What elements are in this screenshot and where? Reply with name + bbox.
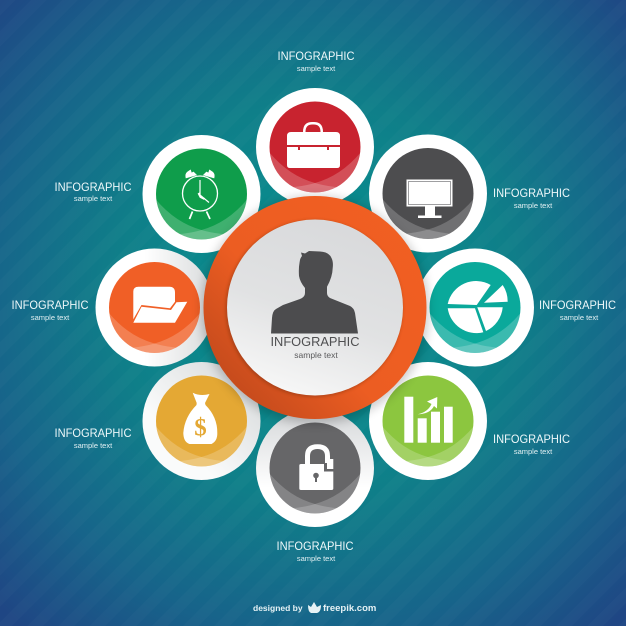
credit: freepik: designed by (253, 603, 303, 613)
label: right: INFOGRAPHIC (539, 298, 616, 312)
central label: INFOGRAPHIC (270, 334, 360, 349)
central label (270, 334, 360, 360)
item: bar chart (369, 362, 487, 480)
label: upper right: INFOGRAPHIC (493, 186, 570, 200)
label: upper left: INFOGRAPHIC (54, 180, 132, 194)
label: upper right (493, 186, 570, 210)
icon: monitor (406, 180, 452, 218)
label: upper left: sample text (74, 194, 113, 203)
icon: pie chart (448, 281, 508, 333)
label: lower left: INFOGRAPHIC (54, 426, 132, 440)
label: right: sample text (560, 313, 599, 322)
icon: briefcase (287, 122, 340, 168)
label: upper right: sample text (514, 201, 553, 210)
label: lower left: sample text (74, 441, 113, 450)
label: left: INFOGRAPHIC (12, 298, 89, 312)
icon: alarm clock (182, 170, 218, 219)
icon: money bag: $ (194, 414, 207, 442)
label: upper left (54, 180, 132, 203)
label: left (12, 298, 89, 322)
item: alarm clock (142, 135, 260, 253)
central ring (204, 196, 426, 419)
label: bottom (276, 539, 354, 563)
icon: open padlock (299, 444, 333, 490)
item: lock (256, 409, 374, 527)
label: lower left (54, 426, 132, 450)
icon: open folder (133, 287, 187, 323)
icon: freepik logo (308, 602, 321, 613)
central ring shadow (201, 196, 429, 424)
item: money bag (142, 362, 260, 480)
label: left: sample text (31, 313, 70, 322)
label: bottom: INFOGRAPHIC (276, 539, 354, 553)
label: top (278, 49, 355, 73)
label: lower right (493, 432, 570, 456)
item: pie chart (416, 248, 534, 366)
icon: person silhouette (271, 251, 358, 334)
label: right (539, 298, 616, 322)
central disc shadow (226, 220, 402, 397)
item: briefcase (256, 88, 374, 206)
central disc (227, 220, 403, 396)
label: lower right: INFOGRAPHIC (493, 432, 570, 446)
credit: freepik: freepik.com (323, 603, 376, 614)
label: top: INFOGRAPHIC (278, 49, 355, 63)
label: top: sample text (297, 64, 336, 73)
icon: growth chart (404, 397, 453, 443)
label: bottom: sample text (297, 554, 336, 563)
label: lower right: sample text (514, 447, 553, 456)
central label: sample text (294, 350, 338, 360)
credit: freepik (253, 602, 376, 614)
item: monitor (369, 134, 487, 252)
item: folder (96, 248, 214, 366)
